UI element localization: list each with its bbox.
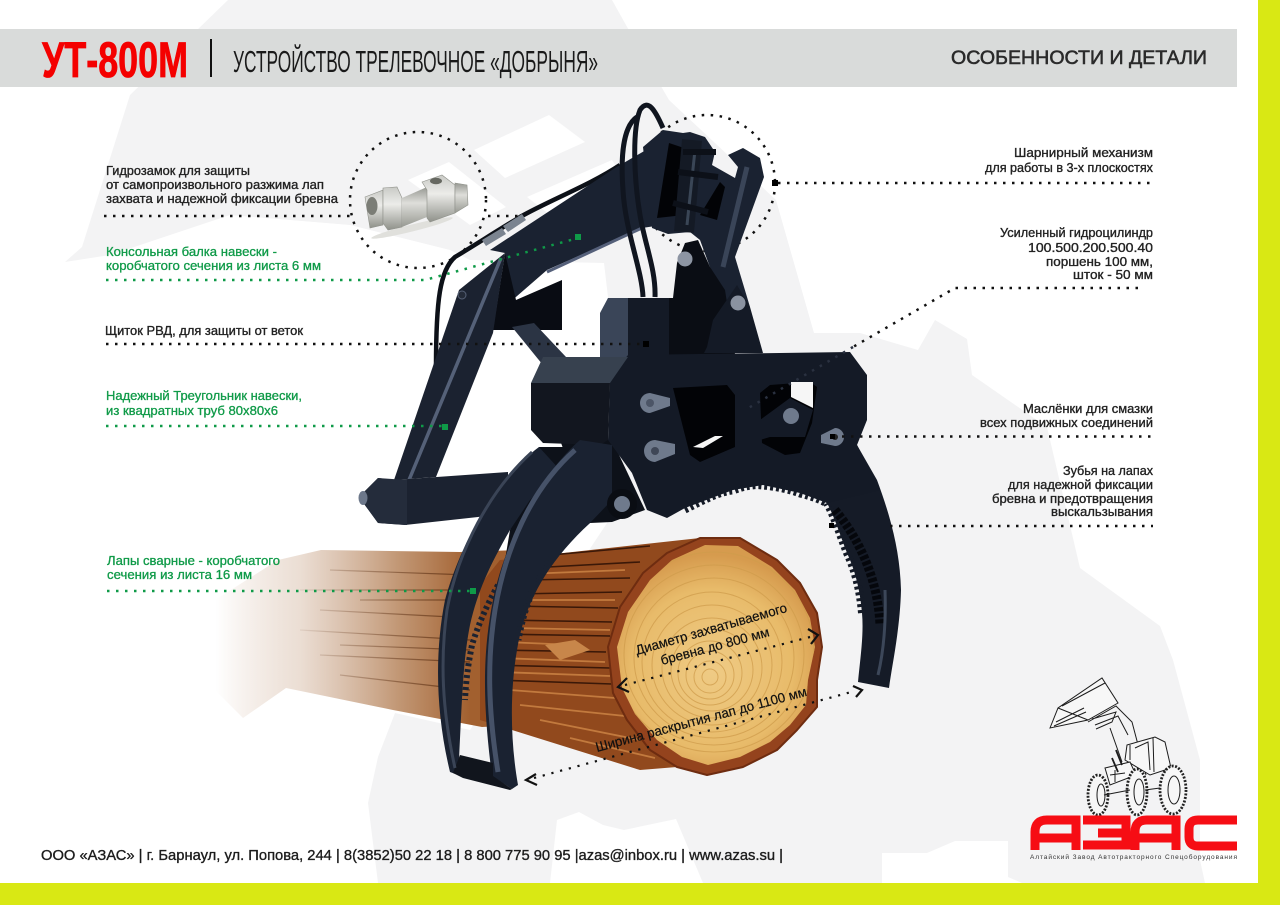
log trunk fading to the left (215, 550, 520, 727)
callout: cantilever beam: Консольная балка навески - (106, 244, 277, 259)
callout: hose shield (105, 323, 649, 347)
callout: hydraulic lock: Гидрозамок для защиты (106, 163, 250, 178)
callout: hydraulic lock: захвата и надежной фиксации бревна (106, 191, 339, 206)
callout: hydraulic cylinder: 100.500.200.500.40 (1028, 240, 1153, 255)
logo caption: Алтайский Завод Автотракторного Спецоборудования (1030, 853, 1237, 861)
hoses to head (622, 105, 663, 297)
callout leaders and labels: left (104, 163, 649, 594)
RVD hose shield (600, 298, 669, 357)
callout: hitch triangle: из квадратных труб 80х80х6 (106, 403, 278, 418)
bolts and grease plates (607, 393, 844, 519)
boom beam (478, 150, 662, 330)
callout: grease fittings: Маслёнки для смазки (1023, 401, 1153, 416)
log (215, 538, 822, 775)
callout: hydraulic cylinder: шток - 50 мм (1073, 267, 1153, 282)
header band (0, 29, 1237, 88)
swivel link (665, 240, 735, 357)
left claws (438, 440, 612, 790)
callout: hydraulic lock: от самопроизвольного разжима лап (106, 177, 324, 192)
callout: jaw teeth: для надежной фиксации (1008, 477, 1153, 492)
icon: hydraulic lock valve (365, 175, 468, 242)
hitch triangle struts (394, 253, 566, 480)
logo: AZAS wordmark (1035, 820, 1237, 850)
frame window large (673, 385, 735, 462)
callout: hitch triangle (106, 388, 448, 430)
callout: cantilever beam (106, 234, 581, 280)
callout: articulated joint (772, 145, 1153, 186)
callout: hose shield: Щиток РВД, для защиты от веток (105, 323, 303, 338)
callout: articulated joint: для работы в 3-х плоскостях (985, 160, 1153, 175)
callout: welded claws: сечения из листа 16 мм (107, 567, 252, 582)
frame window right (760, 382, 817, 455)
hydraulic hose along boom (436, 165, 620, 367)
lower hitch arm (358, 472, 508, 525)
grapple (358, 105, 901, 790)
dimension: jaw opening: Ширина раскрытия лап до 1100 мм (594, 684, 808, 755)
callout: welded claws (107, 553, 476, 594)
callout: hitch triangle: Надежный Треугольник навески, (106, 388, 302, 403)
icon: hose fittings (482, 214, 526, 246)
footer contacts: ООО «АЗАС» | г. Барнаул, ул. Попова, 244 | 8(3852)50 22 18 | 8 800 775 90 95 |azas@inbox.ru | www.azas.su | (41, 847, 783, 864)
bark side of log (480, 538, 700, 770)
right jaw with teeth (760, 445, 901, 688)
dimension: jaw opening (526, 684, 862, 785)
callout: jaw teeth (829, 463, 1153, 528)
callout: hydraulic lock (104, 163, 522, 216)
callout: welded claws: Лапы сварные - коробчатого (107, 553, 280, 568)
link plates (704, 285, 763, 353)
logo: loader tractor drawing (1050, 678, 1186, 815)
callout leaders and labels: right (745, 145, 1153, 528)
callout: hydraulic cylinder: Усиленный гидроцилиндр (1000, 225, 1153, 240)
title: УТ-800М (42, 32, 188, 88)
callout: jaw teeth: Зубья на лапах (1063, 463, 1153, 478)
callout: jaw teeth: бревна и предотвращения (992, 491, 1153, 506)
articulated joint head (643, 130, 764, 307)
subtitle: УСТРОЙСТВО ТРЕЛЕВОЧНОЕ «ДОБРЫНЯ» (233, 43, 598, 79)
claw pivot link (560, 440, 645, 523)
dimension: log diameter: Диаметр захватываемого (634, 600, 789, 658)
section heading: ОСОБЕННОСТИ И ДЕТАЛИ (951, 48, 1207, 69)
callout: hydraulic cylinder: поршень 100 мм, (1046, 254, 1153, 269)
log cross-section (608, 538, 822, 775)
dimension: log diameter: бревна до 800 мм (659, 624, 771, 668)
callout: grease fittings: всех подвижных соединений (980, 415, 1153, 430)
callout: cantilever beam: коробчатого сечения из листа 6 мм (106, 258, 321, 273)
dotted detail circles (350, 115, 775, 268)
main frame plate (531, 352, 880, 518)
callout: articulated joint: Шарнирный механизм (1014, 145, 1153, 160)
callout: jaw teeth: выскальзывания (1051, 504, 1153, 519)
callout: grease fittings (830, 401, 1153, 439)
callout: hydraulic cylinder (745, 225, 1153, 410)
dimension: log diameter (618, 600, 818, 692)
